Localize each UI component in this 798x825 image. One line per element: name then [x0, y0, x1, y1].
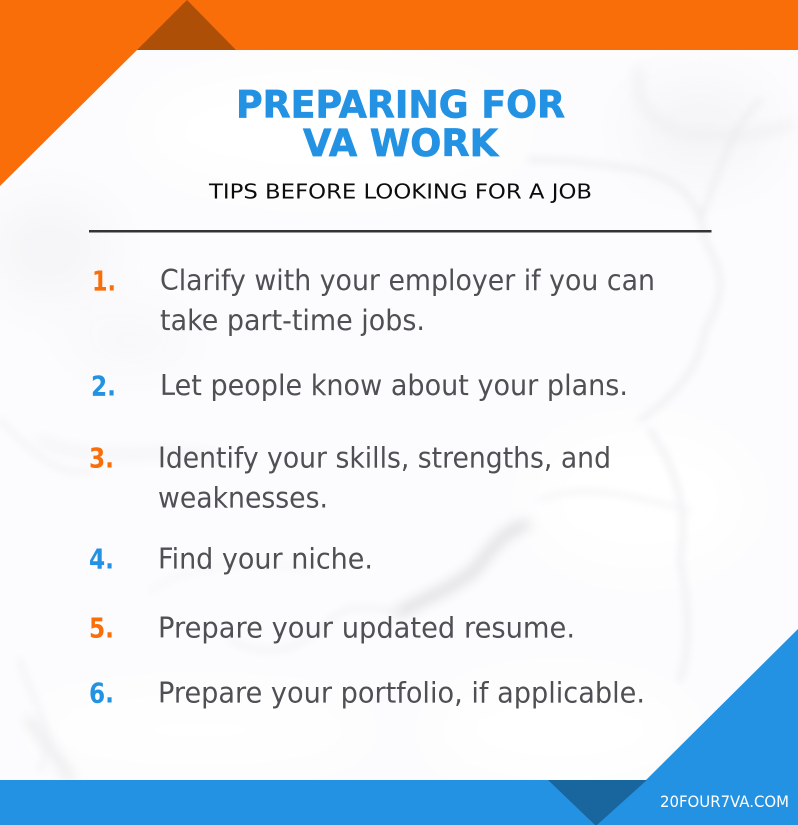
- orange corner triangle: [0, 0, 187, 186]
- subtitle: TIPS BEFORE LOOKING FOR A JOB: [208, 180, 592, 204]
- tip 2: 2.: [91, 370, 116, 402]
- title: [236, 84, 565, 165]
- title: VA WORK: [303, 122, 499, 165]
- tip 4: Find your niche.: [158, 542, 373, 576]
- tip 1: Clarify with your employer if you can: [160, 264, 655, 297]
- tip 3: Identify your skills, strengths, and: [158, 442, 611, 474]
- tip 2: Let people know about your plans.: [160, 369, 628, 402]
- tip 5: 5.: [89, 612, 114, 644]
- website url: 20FOUR7VA.COM: [660, 792, 789, 811]
- tips list: [89, 264, 655, 710]
- tip 1: [92, 264, 655, 337]
- tip 4: 4.: [89, 542, 114, 576]
- tip 6: Prepare your portfolio, if applicable.: [158, 676, 645, 710]
- tip 5: Prepare your updated resume.: [158, 612, 575, 644]
- tip 1: 1.: [92, 264, 116, 298]
- tip 3: 3.: [89, 442, 114, 474]
- tip 1: take part-time jobs.: [160, 304, 425, 337]
- blue corner triangle: [595, 629, 798, 825]
- orange top banner: [0, 0, 798, 50]
- blue bottom banner: [0, 780, 798, 825]
- tip 6: 6.: [89, 676, 114, 710]
- title: PREPARING FOR: [236, 84, 565, 126]
- dark orange fold triangle: [137, 0, 236, 50]
- divider line: [89, 230, 712, 232]
- tip 3: weaknesses.: [158, 482, 328, 514]
- dark blue fold triangle: [548, 780, 647, 825]
- tip 3: [89, 442, 611, 514]
